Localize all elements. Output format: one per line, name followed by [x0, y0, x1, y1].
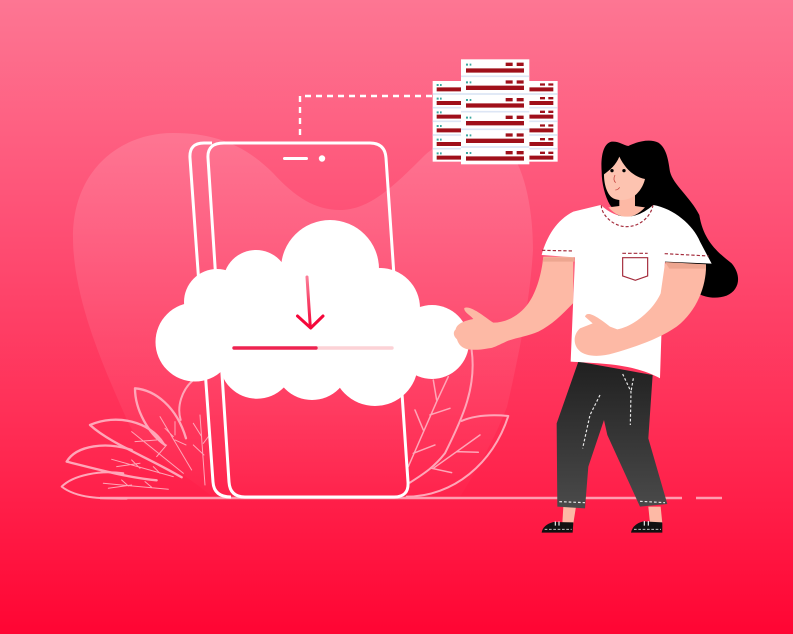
phone: front outline — [208, 143, 408, 497]
leaf veins — [408, 377, 480, 473]
shoe: right — [631, 521, 662, 533]
phone: speaker — [283, 157, 308, 160]
background blob — [73, 133, 533, 497]
lower body — [542, 362, 667, 533]
upper body — [542, 141, 738, 378]
shoe: left — [542, 521, 573, 533]
phone: camera — [319, 155, 325, 162]
right leaves — [407, 350, 508, 497]
shirt — [542, 205, 712, 378]
nose and mouth — [614, 175, 620, 190]
face — [604, 157, 645, 200]
collar stitching — [601, 205, 653, 227]
dashed connector — [300, 96, 434, 135]
rack: right column — [528, 81, 558, 162]
right arm — [575, 263, 706, 356]
woman — [454, 141, 738, 533]
left arm and hand — [454, 257, 573, 350]
leaf: behind phone — [179, 380, 193, 420]
leg skin — [562, 507, 662, 523]
rack: left column — [433, 81, 463, 162]
eyes — [610, 169, 626, 172]
leaf: lower right — [407, 415, 508, 497]
leaf: bottom — [62, 472, 127, 499]
trouser stitching — [559, 374, 665, 503]
leaf: upper right — [410, 350, 473, 483]
sleeve stitching — [542, 250, 709, 256]
phone: back outline — [190, 143, 231, 497]
neck — [608, 193, 645, 217]
hair — [601, 141, 738, 298]
leaf: top — [135, 388, 186, 445]
ground line — [100, 497, 722, 499]
server rack — [433, 59, 558, 164]
trousers — [557, 362, 667, 508]
download arrow — [298, 277, 323, 328]
rack: centre column — [461, 59, 529, 164]
left leaves — [62, 380, 208, 499]
sleeve shadow: left — [543, 257, 575, 262]
progress bar — [234, 346, 392, 350]
pocket — [622, 253, 648, 280]
leaf veins — [103, 415, 208, 489]
leaf: third — [67, 446, 157, 480]
cloud — [156, 220, 469, 406]
sleeve shadow: right — [665, 262, 706, 269]
leaf: second — [90, 420, 182, 477]
